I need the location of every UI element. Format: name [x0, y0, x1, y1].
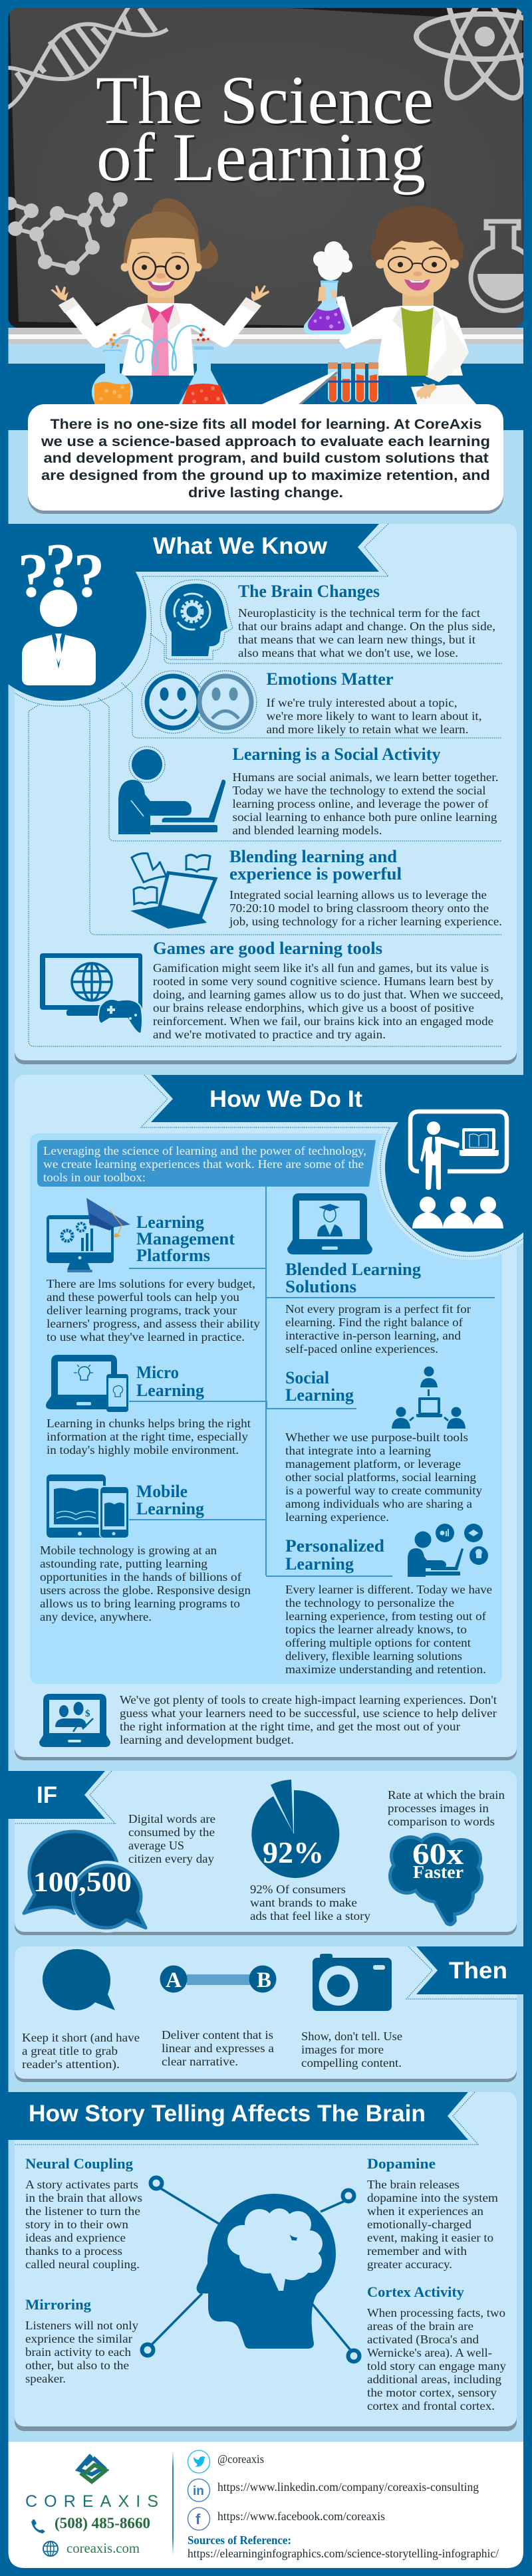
linkedin: in	[193, 2484, 204, 2498]
tool: Micro Learning: Learning in chunks helps bring the right	[47, 1417, 251, 1430]
item: Emotions Matter: and more likely to retain what we learn.	[266, 723, 468, 736]
ring around presenter circle	[377, 1133, 523, 1260]
icon: laptop and phone lightbulb	[46, 1355, 128, 1412]
stat: 92% pie chart: 92% Of consumers	[250, 1883, 346, 1896]
banner: What We Know: What We Know	[153, 533, 328, 559]
tool: Social Learning: learning experience.	[285, 1510, 389, 1524]
title: of Learning	[96, 120, 426, 195]
icon: CoreAxis logo	[78, 2455, 106, 2482]
tool: Personalized Learning: Every learner is different. Today we have	[285, 1583, 492, 1596]
panel: Then	[15, 1946, 523, 2082]
icon: person at laptop	[118, 747, 225, 834]
item: Blending learning: Integrated social learning allows us to leverage the	[229, 888, 487, 901]
icon: speech bubble	[43, 1949, 115, 2010]
facebook	[188, 2508, 385, 2530]
stat: 60x faster brain: Rate at which the brain	[388, 1788, 505, 1802]
item: Emotions Matter: we're more likely to want to learn about it,	[266, 709, 481, 723]
text: Cortex Activity: activated (Broca's and	[367, 2333, 479, 2347]
tool: Learning Management Platforms: deliver learning programs, track your	[47, 1304, 237, 1317]
tool: Mobile Learning: Mobile	[136, 1482, 188, 1501]
tool: Learning Management Platforms: and these powerful tools can help you	[47, 1290, 239, 1304]
icon: monitor and game controller	[40, 953, 142, 1034]
tip: linear content: Deliver content that is	[162, 2028, 273, 2042]
item: Games: Gamification might seem like it's all fun and games, but its value is	[153, 961, 489, 975]
tip: show don't tell: compelling content.	[301, 2056, 402, 2069]
footer	[8, 2442, 523, 2568]
divider	[172, 2451, 174, 2555]
logo wordmark: COREAXIS	[25, 2492, 158, 2511]
icon: brain head	[160, 580, 233, 659]
twitter: @coreaxis	[217, 2452, 264, 2466]
tool: Learning Management Platforms: learners' progress, and assess their ability	[47, 1317, 260, 1330]
tool: Social Learning: Learning	[285, 1385, 354, 1405]
text: Mirroring	[25, 2296, 138, 2385]
linkedin	[188, 2479, 479, 2502]
facebook: f	[196, 2511, 201, 2527]
header scene	[8, 8, 523, 404]
icon: atom	[414, 8, 523, 101]
stat: 100,500 words: Digital words are	[128, 1812, 215, 1825]
text: Mirroring: speaker.	[25, 2372, 66, 2385]
banner: story telling	[8, 2092, 478, 2145]
item: The Brain Changes: Neuroplasticity is the technical term for the fact	[238, 606, 480, 620]
banner: How We Do It	[141, 1075, 523, 1127]
tool: Social Learning: management platform, or leverage	[285, 1457, 461, 1470]
tool: Personalized Learning: the technology to personalize the	[285, 1596, 454, 1609]
text: Cortex Activity: cortex and frontal cortex.	[367, 2399, 495, 2412]
tip: keep it short: a great title to grab	[22, 2044, 118, 2057]
item: Games: rooted in some very sound cognitive science. Humans learn best by	[153, 975, 493, 988]
tip: keep it short: reader's attention).	[22, 2057, 120, 2071]
icon: question marks: ?	[73, 541, 105, 610]
icon: molecule	[3, 192, 128, 275]
text: Cortex Activity: the motor cortex, sensory	[367, 2386, 497, 2399]
chalk tray	[8, 328, 524, 344]
panel: What We Know	[0, 519, 517, 1064]
tool: Blended Learning Solutions	[285, 1193, 471, 1355]
text: Neural Coupling: A story activates parts	[25, 2178, 138, 2191]
closing note: learning and development budget.	[120, 1733, 294, 1746]
icon: A to B: B	[257, 1968, 271, 1992]
icon: audience	[412, 1197, 503, 1229]
icon: laptop with business people: $	[85, 1708, 90, 1719]
tool: Blended Learning Solutions: self-paced online experiences.	[285, 1342, 438, 1355]
stat: 92% pie chart: 92%	[263, 1835, 324, 1869]
tool: Social Learning: Social	[285, 1368, 329, 1387]
text: Neural Coupling: thanks to a process	[25, 2244, 122, 2258]
tool: Blended Learning Solutions: elearning. Find the right balance of	[285, 1316, 463, 1329]
item: Games: our brains release endorphins, which give us a boost of positive	[153, 1001, 474, 1014]
closing note: the right information at the right time, and get the most out of your	[120, 1720, 460, 1733]
item: Emotions Matter: Emotions Matter	[266, 669, 394, 689]
stat: 92% pie chart	[250, 1780, 370, 1923]
tool: Learning Management Platforms	[47, 1198, 260, 1344]
item: Games	[40, 939, 503, 1041]
tip: keep it short	[22, 1949, 140, 2071]
icon: presenter board	[410, 1112, 507, 1190]
text: Cortex Activity: Cortex Activity	[367, 2283, 464, 2300]
icon: laptop with business people	[39, 1694, 110, 1747]
icon: monitor with graduation cap	[47, 1198, 130, 1272]
tool: Social Learning: other social platforms, social learning	[285, 1470, 476, 1484]
panel: How We Do It	[15, 1075, 532, 1760]
twitter	[188, 2450, 264, 2473]
dotted connector lines	[15, 576, 502, 1046]
tool: Mobile Learning: astounding rate, putting learning	[40, 1557, 207, 1570]
tip: linear content: linear and expresses a	[162, 2042, 274, 2055]
tip: keep it short: Keep it short (and have	[22, 2031, 140, 2045]
banner: IF: IF	[37, 1782, 57, 1808]
column dividers	[129, 1187, 495, 1576]
tool: Mobile Learning	[40, 1474, 251, 1623]
text: Neural Coupling	[25, 2155, 142, 2271]
chalkboard	[3, 0, 532, 328]
tool: Personalized Learning: offering multiple options for content	[285, 1636, 471, 1649]
title: of Learning	[98, 122, 428, 197]
tool: Mobile Learning: Mobile technology is growing at an	[40, 1544, 217, 1557]
tool: Micro Learning: Micro	[136, 1363, 179, 1382]
tool: Learning Management Platforms: to use what they've learned in practice.	[47, 1330, 245, 1344]
icon: learner with topic bubbles	[408, 1524, 488, 1577]
stat: 92% pie chart: ads that feel like a story	[250, 1909, 370, 1923]
tool: Blended Learning Solutions: Solutions	[285, 1277, 356, 1296]
icon: DNA helix	[5, 5, 168, 109]
text: Mirroring: brain activity to each	[25, 2345, 131, 2359]
tool: Learning Management Platforms: There are lms solutions for every budget,	[47, 1277, 255, 1290]
stat: 60x faster brain	[388, 1788, 505, 1927]
stat: 100,500 words: consumed by the	[128, 1825, 215, 1839]
title	[97, 76, 434, 197]
item: Learning is a Social Activity: Learning is a Social Activity	[233, 745, 440, 764]
title: The Science	[96, 62, 434, 138]
illustration: flasks and tubes	[92, 326, 229, 413]
intro callout: we create learning experiences that work. Here are some of the	[43, 1157, 364, 1171]
item: Games: and we're motivated to practice and try again.	[153, 1028, 386, 1041]
tool: Mobile Learning: any device, anywhere.	[40, 1610, 152, 1623]
icon: question marks: ?	[45, 531, 76, 600]
text: Neural Coupling: called neural coupling.	[25, 2258, 140, 2271]
circle with presenter	[380, 1109, 523, 1256]
tool: Learning Management Platforms: Management	[136, 1229, 235, 1248]
item: Blending learning: job, using technology for a richer learning experience.	[229, 915, 502, 928]
item: The Brain Changes: that means that we can learn new things, but it	[238, 633, 475, 646]
banner: Then: Then	[449, 1958, 507, 1984]
panel: intro text: we use a science-based approach to evaluate each learning	[41, 434, 490, 449]
text: Cortex Activity: areas of the brain are	[367, 2319, 473, 2333]
website: coreaxis.com	[66, 2540, 140, 2556]
tool: Personalized Learning: learning experience, from testing out of	[285, 1609, 486, 1623]
tool: Learning Management Platforms: Learning	[136, 1213, 204, 1232]
item: The Brain Changes: that our brains adapt and change. On the plus side,	[238, 620, 495, 633]
icon: question marks	[17, 531, 105, 610]
text: Dopamine: event, making it easier to	[367, 2231, 493, 2244]
tool: Mobile Learning: users across the globe. Responsive design	[40, 1583, 251, 1597]
text: Dopamine: The brain releases	[367, 2178, 460, 2191]
phone: (508) 485-8660	[55, 2515, 150, 2531]
tool: Personalized Learning: Learning	[285, 1554, 354, 1574]
item: Learning is a Social Activity: Humans are social animals, we learn better together.	[233, 770, 499, 784]
title: The Science	[98, 64, 436, 140]
tool: Mobile Learning: allows us to bring learning programs to	[40, 1597, 240, 1610]
item: Games: doing, and learning games allow us to do just that. When we succeed,	[153, 988, 503, 1001]
text: Neural Coupling: Neural Coupling	[25, 2155, 133, 2172]
intro callout	[37, 1140, 376, 1187]
text: Mirroring: Mirroring	[25, 2296, 91, 2313]
text: Neural Coupling: in the brain that allows	[25, 2191, 142, 2204]
icon: happy and sad faces	[142, 671, 257, 733]
banner: How We Do It: How We Do It	[209, 1086, 362, 1112]
panel: How Story Telling Affects The Brain	[8, 2092, 517, 2431]
icon: tablet and phone	[47, 1474, 128, 1538]
stat: 60x faster brain: processes images in	[388, 1802, 489, 1815]
stat: 60x faster brain: 60x	[412, 1837, 464, 1871]
panel: intro text: drive lasting change.	[188, 485, 343, 501]
illustration: woman scientist	[51, 198, 269, 376]
tip: show don't tell: images for more	[301, 2043, 384, 2056]
tool: Learning Management Platforms: Platforms	[136, 1246, 210, 1265]
closing note: guess what your learners need to be successful, use science to help deliver	[120, 1706, 497, 1720]
tool: Personalized Learning	[285, 1524, 492, 1676]
tool: Mobile Learning: opportunities in the hands of billions of	[40, 1570, 241, 1583]
tool: Micro Learning: in today's highly mobile environment.	[47, 1443, 239, 1457]
tip: linear content	[160, 1965, 277, 2068]
sources	[188, 2533, 499, 2560]
text: Dopamine	[367, 2155, 498, 2271]
intro callout: Leveraging the science of learning and the power of technology,	[43, 1144, 366, 1157]
intro callout: tools in our toolbox:	[43, 1171, 146, 1184]
sources: https://elearninginfographics.com/science-storytelling-infographic/	[188, 2547, 499, 2560]
text: Cortex Activity: additional areas, including	[367, 2373, 501, 2386]
item: Games: Games are good learning tools	[153, 939, 382, 958]
icon: person	[22, 590, 96, 685]
text: Neural Coupling: ideas and exprience	[25, 2231, 126, 2244]
panel: intro text: There is no one-size fits all model for learning. At CoreAxis	[51, 417, 481, 432]
banner: Then	[406, 1946, 523, 1999]
inner tools panel	[30, 1133, 502, 1684]
panel: IF	[8, 1771, 517, 1935]
tool: Micro Learning: information at the right time, especially	[47, 1430, 248, 1443]
text: Mirroring: other, but also to the	[25, 2359, 129, 2372]
facebook: https://www.facebook.com/coreaxis	[217, 2510, 385, 2523]
icon: chalk flask	[471, 221, 532, 310]
tool: Social Learning: among individuals who are sharing a	[285, 1497, 472, 1510]
tip: show don't tell	[301, 1954, 402, 2069]
banner: IF	[8, 1771, 115, 1823]
tool: Blended Learning Solutions: Blended Learning	[285, 1260, 421, 1279]
tool: Personalized Learning: delivery, flexible learning solutions	[285, 1649, 462, 1663]
stat: 100,500 words: 100,500	[33, 1867, 132, 1898]
item: Blending learning: experience is powerful	[229, 864, 402, 883]
stat: 100,500 words: average US	[128, 1839, 184, 1852]
icon: question marks: ?	[17, 541, 49, 610]
tip: linear content: clear narrative.	[162, 2055, 238, 2068]
circle with question person	[0, 519, 146, 711]
banner: What We Know	[8, 524, 388, 576]
text: Dopamine: Dopamine	[367, 2155, 436, 2172]
icon: laptop and books	[130, 854, 215, 929]
text: Dopamine: when it experiences an	[367, 2204, 483, 2218]
icon: camera	[313, 1954, 392, 2011]
item: Blending learning: Blending learning and	[229, 847, 398, 866]
tool: Social Learning: that integrate into a learning	[285, 1444, 431, 1457]
stat: 100,500 words: citizen every day	[128, 1852, 214, 1865]
item: Learning is a Social Activity: learning process online, and leverage the power of	[233, 797, 489, 810]
tool: Blended Learning Solutions: interactive in-person learning, and	[285, 1329, 461, 1342]
stat: 60x faster brain: Faster	[413, 1862, 464, 1882]
panel: intro text: and development program, and build custom solutions that	[44, 451, 488, 466]
item: Games: reinforcement. When we fail, our brains kick into an engaged mode	[153, 1014, 493, 1028]
linkedin: https://www.linkedin.com/company/coreaxis-consulting	[217, 2480, 479, 2494]
tip: show don't tell: Show, don't tell. Use	[301, 2030, 402, 2043]
stat: 60x faster brain: comparison to words	[388, 1815, 495, 1828]
text: Mirroring: Listeners will not only	[25, 2319, 138, 2332]
illustration: head with brain	[142, 2178, 359, 2361]
text: Cortex Activity: told story can engage many	[367, 2359, 506, 2373]
text: Mirroring: exprience the similar	[25, 2332, 132, 2345]
item: Learning is a Social Activity: Today we have the technology to extend the social	[233, 784, 485, 797]
tool: Blended Learning Solutions: Not every program is a perfect fit for	[285, 1302, 471, 1316]
tool: Social Learning: is a powerful way to create community	[285, 1484, 482, 1497]
icon: A to B: A	[166, 1968, 182, 1992]
text: Dopamine: greater accuracy.	[367, 2258, 452, 2271]
closing note: We've got plenty of tools to create high-impact learning experiences. Don't	[120, 1693, 497, 1706]
tool: Personalized Learning: topics the learner already knows, to	[285, 1623, 467, 1636]
text: Neural Coupling: the listener to turn the	[25, 2204, 140, 2218]
text: Dopamine: dopamine into the system	[367, 2191, 498, 2204]
icon: laptop with graduate	[287, 1193, 372, 1254]
item: Learning is a Social Activity: social learning to enhance both pure online learning	[233, 810, 497, 824]
tool: Mobile Learning: Learning	[136, 1499, 204, 1518]
text: Cortex Activity: When processing facts, two	[367, 2306, 505, 2319]
item: Blending learning	[130, 847, 502, 929]
light blue page body	[8, 430, 523, 2444]
sources: Sources of Reference:	[188, 2533, 291, 2547]
item: Emotions Matter: If we're truly interested about a topic,	[266, 696, 458, 709]
icon: A to B	[160, 1965, 277, 1993]
banner: story telling: How Story Telling Affects The Brain	[29, 2101, 426, 2127]
text: Cortex Activity: Wernicke's area). A well-	[367, 2346, 492, 2360]
wall band	[8, 344, 524, 364]
stat: 92% pie chart: want brands to make	[250, 1896, 357, 1909]
tool: Social Learning: Whether we use purpose-built tools	[285, 1431, 468, 1444]
tool: Micro Learning: Learning	[136, 1381, 204, 1400]
text: Neural Coupling: story in to their own	[25, 2218, 128, 2231]
item: Learning is a Social Activity	[118, 745, 499, 837]
stat: 100,500 words	[24, 1812, 215, 1932]
tool: Micro Learning	[46, 1355, 251, 1457]
tool: Personalized Learning: maximize understanding and retention.	[285, 1663, 486, 1676]
item: The Brain Changes: also means that what we don't use, we lose.	[238, 646, 458, 659]
text: Dopamine: emotionally-charged	[367, 2218, 471, 2231]
icon: network of people	[392, 1367, 466, 1429]
item: Learning is a Social Activity: and blended learning models.	[233, 824, 382, 837]
item: The Brain Changes	[160, 580, 495, 659]
tool: Social Learning	[285, 1367, 482, 1524]
text: Dopamine: remember and with	[367, 2244, 467, 2258]
item: The Brain Changes: The Brain Changes	[238, 582, 380, 601]
closing note	[39, 1693, 497, 1747]
panel: intro text	[28, 404, 503, 514]
item: Emotions Matter	[142, 669, 481, 736]
tool: Personalized Learning: Personalized	[285, 1536, 385, 1556]
panel: intro text: are designed from the ground up to maximize retention, and	[41, 468, 490, 483]
desk band	[8, 364, 524, 430]
text: Cortex Activity	[367, 2283, 506, 2412]
item: Blending learning: 70:20:10 model to bring classroom theory onto the	[229, 901, 489, 915]
illustration: man scientist	[256, 206, 477, 407]
